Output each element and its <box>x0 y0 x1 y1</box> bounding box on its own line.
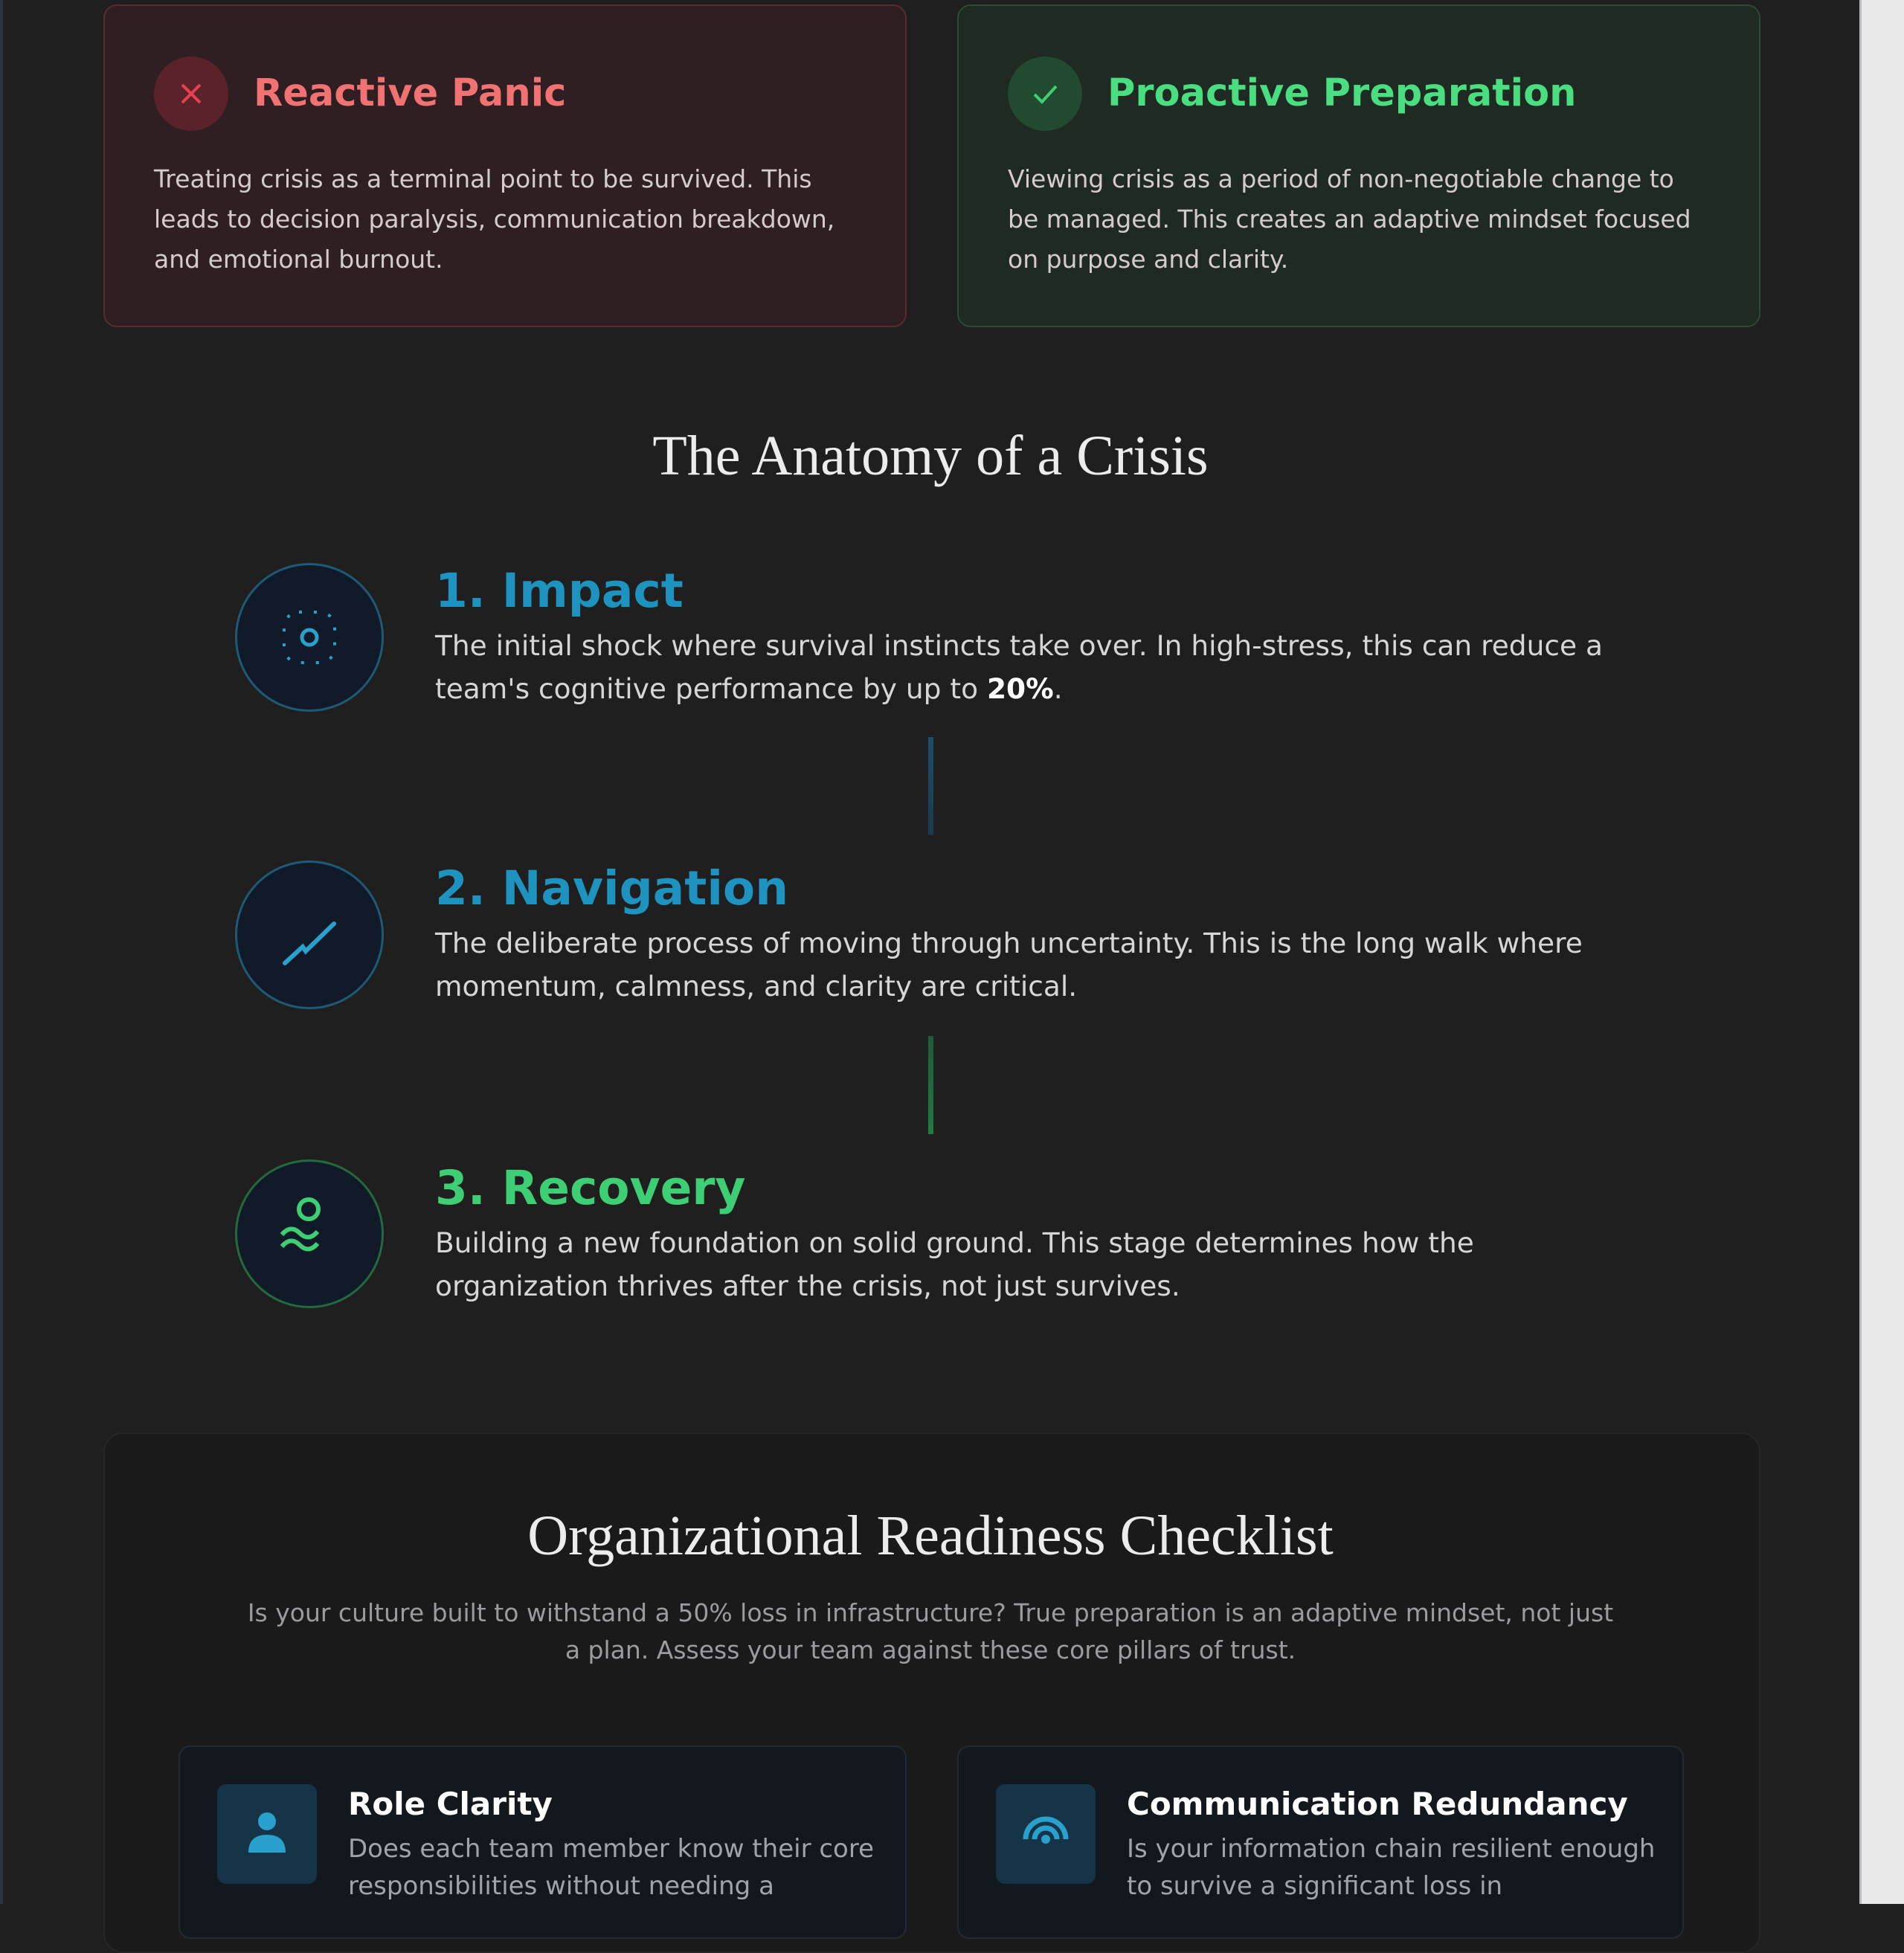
icon: signal <box>996 1784 1096 1884</box>
text: The initial shock where survival instincts take over. In high-stress, this can reduce a team's cognitive performance by up to 20%. <box>435 629 1603 705</box>
left edge line <box>0 0 3 1904</box>
connector arrow 1 <box>928 737 933 835</box>
stage 1: impact <box>235 563 1603 712</box>
icon: x <box>154 57 228 131</box>
text block: Viewing crisis as a period of non-negotiable change to be managed. This creates an adaptive mindset focused on purpose and clarity. <box>1008 164 1691 274</box>
text: The deliberate process of moving through uncertainty. This is the long walk where momentum, calmness, and clarity are critical. <box>435 927 1583 1003</box>
right scrollbar strip <box>1859 0 1904 1904</box>
text block: Treating crisis as a terminal point to be survived. This leads to decision paralysis, communication breakdown, and emotional burnout. <box>154 164 834 274</box>
stage 2: navigation <box>235 860 1583 1009</box>
heading: 3. Recovery <box>435 1161 745 1215</box>
icon: recovery <box>235 1159 384 1308</box>
text: Is your information chain resilient enough to survive a significant loss in <box>1127 1834 1655 1901</box>
panel: proactive preparation <box>957 4 1760 327</box>
title: anatomy: The Anatomy of a Crisis <box>652 425 1209 487</box>
card: communication redundancy <box>957 1746 1684 1939</box>
heading: checklist: Organizational Readiness Checklist <box>527 1505 1334 1567</box>
text: Building a new foundation on solid ground. This stage determines how the organization thrives after the crisis, not just survives. <box>435 1226 1474 1302</box>
heading: Communication Redundancy <box>1127 1786 1628 1822</box>
icon: check <box>1008 57 1082 131</box>
heading: Proactive Preparation <box>1107 71 1576 115</box>
icon: impact <box>235 563 384 712</box>
card: role clarity <box>178 1746 907 1939</box>
panel: reactive panic <box>103 4 907 327</box>
icon: person <box>217 1784 317 1884</box>
heading: Reactive Panic <box>254 71 566 115</box>
heading: Role Clarity <box>348 1786 553 1822</box>
text: checklist intro: Is your culture built to withstand a 50% loss in infrastructure? True preparation is an adaptive mindset, not just a plan. Assess your team against these core pillars of trust. <box>248 1598 1613 1664</box>
heading: 2. Navigation <box>435 861 788 916</box>
icon: navigation <box>235 860 384 1009</box>
heading: 1. Impact <box>435 564 684 618</box>
connector arrow 2 <box>928 1036 933 1134</box>
text: Does each team member know their core responsibilities without needing a <box>348 1834 874 1901</box>
panel: readiness checklist <box>103 1432 1760 1953</box>
stage 3: recovery <box>235 1159 1474 1308</box>
